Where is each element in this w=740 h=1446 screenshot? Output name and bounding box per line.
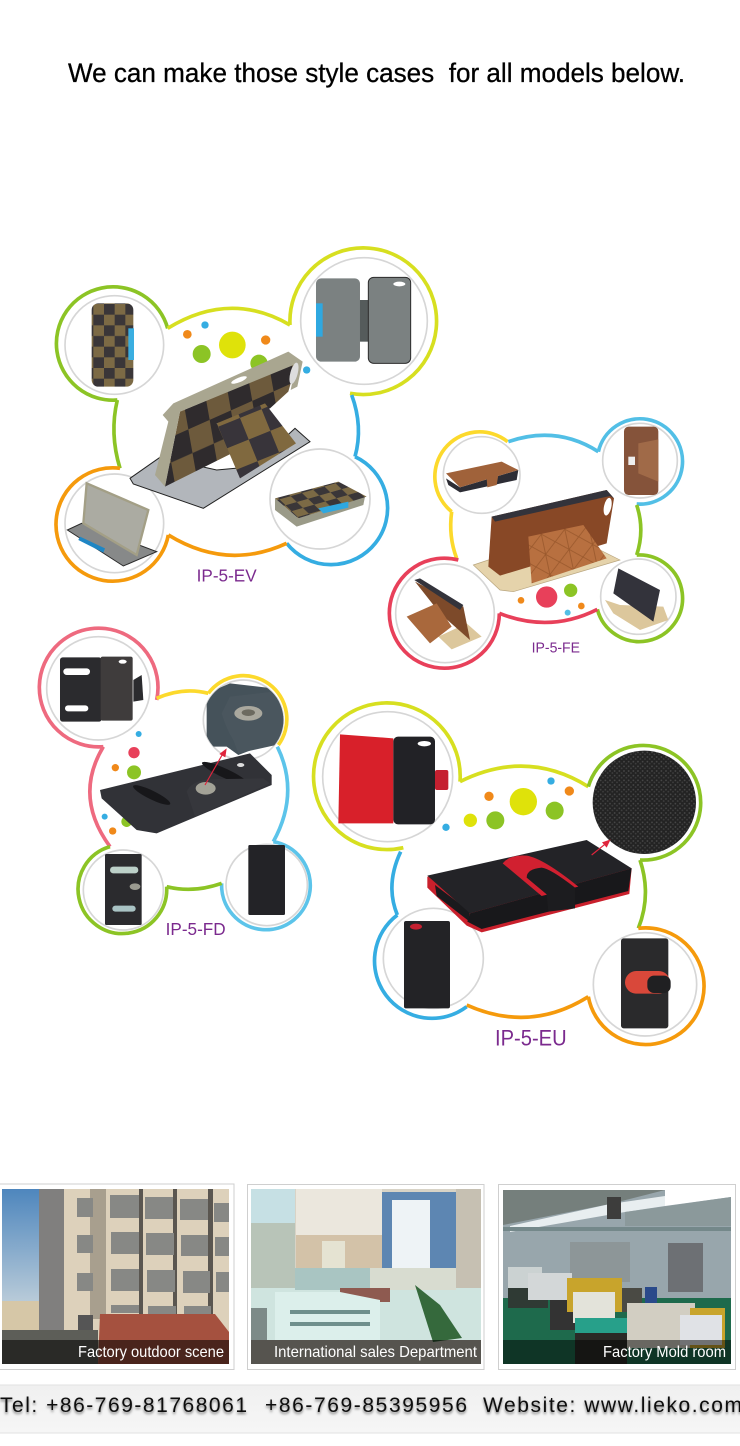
photo: lying case [270,449,370,549]
contact bar [0,1385,740,1433]
caption: Factory Mold room [603,1344,726,1361]
contact bar: Tel: +86-769-81768061 [0,1394,247,1417]
photo: case back [65,296,164,394]
model label: IP-5-EU [495,1026,567,1051]
photo: snap button close-up [203,680,287,760]
photo: back of wallet [383,908,483,1008]
photo: stand side view [396,564,494,663]
photo panel: factory outdoor scene [0,1184,234,1370]
photo: open black case [47,637,150,740]
panel: IP-5-EV case cluster [56,248,437,586]
photo: stand inner view [601,559,676,634]
coloured cloud outline [39,628,310,934]
arrow: red pointer to close-up [205,748,227,785]
title: We can make those style cases for all models below. [68,58,685,88]
contact bar: Website: www.lieko.com [483,1394,740,1417]
photo: back of case [226,844,307,926]
caption: Factory outdoor scene [78,1344,224,1361]
photo panel: international sales department [248,1184,484,1370]
main product: black flip case with snap [100,753,272,833]
model label: IP-5-FD [166,919,226,939]
photo: inside standing view [65,474,164,573]
panel: IP-5-FD case cluster [39,628,310,939]
main product: brown stand case [473,490,620,592]
main product: black and red wallet [427,840,632,932]
decorative dots [183,321,310,374]
photo: closed wallet [443,437,520,513]
caption: International sales Department [274,1344,478,1361]
contact bar: +86-769-85395956 [265,1394,467,1417]
photo: front with windows [83,850,163,930]
photo: front with red clasp [593,933,697,1036]
photo: open red interior wallet [323,712,453,842]
coloured cloud outline [56,248,437,581]
photo: patterned back [603,423,677,498]
decorative dots [518,584,585,616]
panel: IP-5-EU case cluster [314,703,704,1051]
building windows [77,1195,229,1331]
photo panel: factory mold room [498,1184,736,1370]
photo: leather texture close-up [593,751,696,854]
model label: IP-5-EV [197,566,257,586]
coloured cloud outline [389,419,683,668]
decorative dots [102,731,142,835]
decorative dots [442,777,574,831]
model label: IP-5-FE [532,640,580,657]
coloured cloud outline [314,703,704,1045]
photo: open case interior [301,258,427,384]
panel: IP-5-FE case cluster [389,419,683,668]
main product: checkered stand case [130,352,310,508]
arrow: red pointer to texture [592,839,611,855]
